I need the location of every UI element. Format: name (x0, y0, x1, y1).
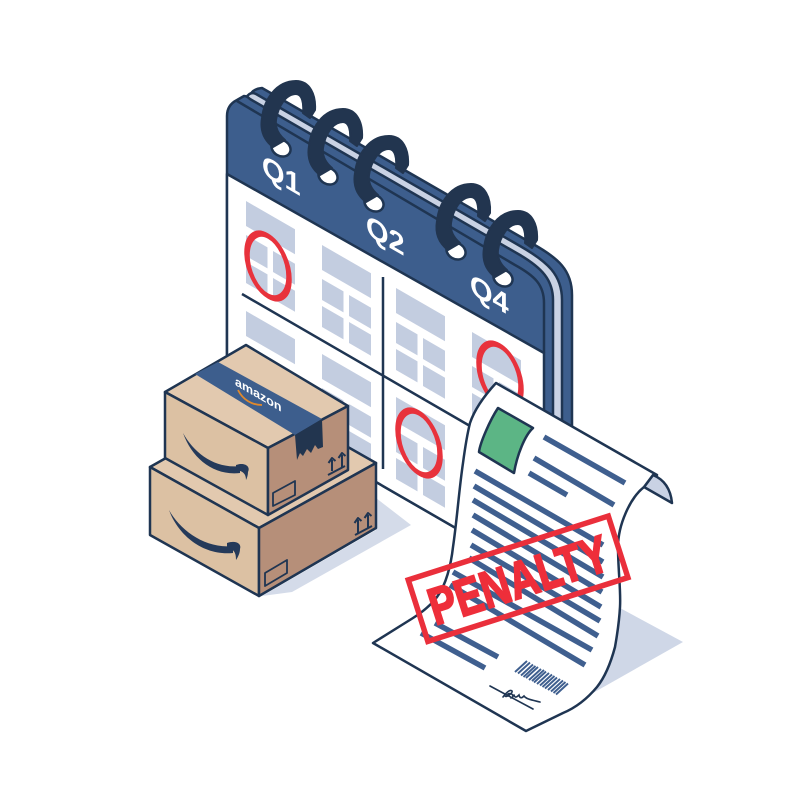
penalty stamp (408, 516, 628, 641)
top box tape (195, 362, 322, 435)
calendar header edge line (237, 101, 544, 353)
cardboard boxes (150, 345, 376, 596)
red circle: Q1 (247, 224, 289, 308)
green photo block (479, 408, 533, 473)
bottom box label (265, 560, 287, 586)
bottom box smile (169, 510, 240, 560)
bottom box arrows (354, 513, 372, 535)
amazon orange smile (238, 390, 262, 405)
calendar front cover (227, 96, 553, 579)
calendar white page (227, 174, 544, 579)
top box label (273, 481, 295, 506)
label Q2: Q2 (366, 208, 405, 263)
label Q4: Q4 (470, 267, 509, 322)
spiral rings (261, 81, 537, 290)
signature (490, 686, 540, 709)
paper curl (644, 475, 672, 503)
red circle: Q3 (398, 401, 440, 485)
label Q1: Q1 (262, 148, 301, 203)
red circle: Q4 (479, 334, 521, 418)
box shadow (262, 498, 411, 596)
penalty document (373, 383, 672, 731)
barcode (515, 661, 568, 694)
calendar grid lines (242, 277, 470, 469)
amazon logo text: amazon (235, 374, 282, 415)
calendar quarter cells (246, 201, 521, 553)
bottom box (150, 401, 376, 596)
paper sheet (373, 383, 657, 731)
stamp border (408, 516, 628, 641)
top box (165, 345, 348, 515)
stamp word: PENALTY (421, 525, 616, 637)
top box arrows (328, 453, 346, 475)
top box smile (183, 433, 249, 480)
document text lines (421, 437, 625, 668)
calendar (227, 81, 572, 579)
calendar back cover (250, 88, 572, 480)
paper shadow (560, 608, 683, 702)
top box tape flap (295, 419, 323, 460)
calendar page stack (246, 93, 562, 480)
